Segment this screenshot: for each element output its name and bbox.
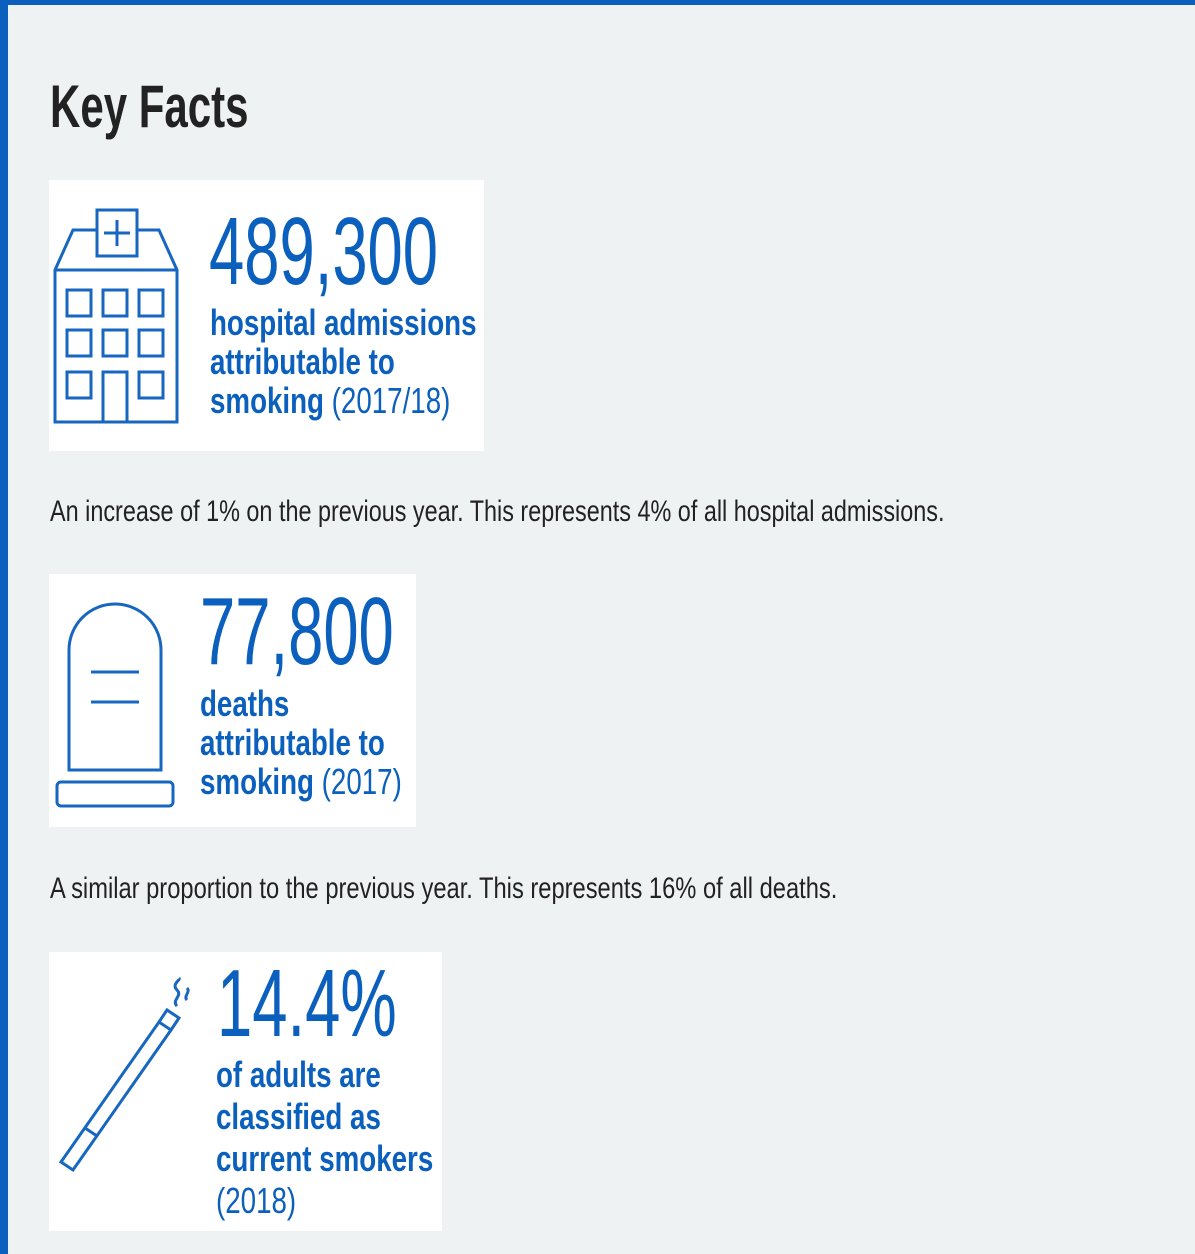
stat: 77,800: 77,800: [200, 578, 394, 685]
label: smoking (2017/18): [210, 380, 450, 421]
panel: smokers: [49, 952, 442, 1231]
icon: hospital: [54, 208, 178, 424]
label: attributable to: [210, 341, 395, 382]
stat: 489,300: 489,300: [209, 198, 438, 305]
label: deaths: [200, 683, 289, 724]
label: (2018): [216, 1180, 296, 1221]
label: [216, 1054, 433, 1221]
label: smoking (2017): [200, 761, 402, 802]
label: hospital admissions: [210, 302, 476, 343]
label: [200, 683, 402, 802]
title: Key Facts: [50, 73, 248, 140]
icon: cigarette: [59, 977, 190, 1172]
stat: 14.4%: 14.4%: [217, 950, 397, 1057]
panel: hospital admissions: [49, 180, 484, 451]
label: current smokers: [216, 1138, 433, 1179]
label: [210, 302, 476, 421]
label: attributable to: [200, 722, 385, 763]
label: of adults are: [216, 1054, 381, 1095]
panel: deaths: [49, 574, 416, 827]
text: deaths note: A similar proportion to the previous year. This represents 16% of all deaths.: [50, 872, 837, 905]
text: hospital note: An increase of 1% on the previous year. This represents 4% of all hospital admissions.: [50, 495, 944, 528]
icon: gravestone: [56, 602, 174, 808]
label: classified as: [216, 1096, 381, 1137]
